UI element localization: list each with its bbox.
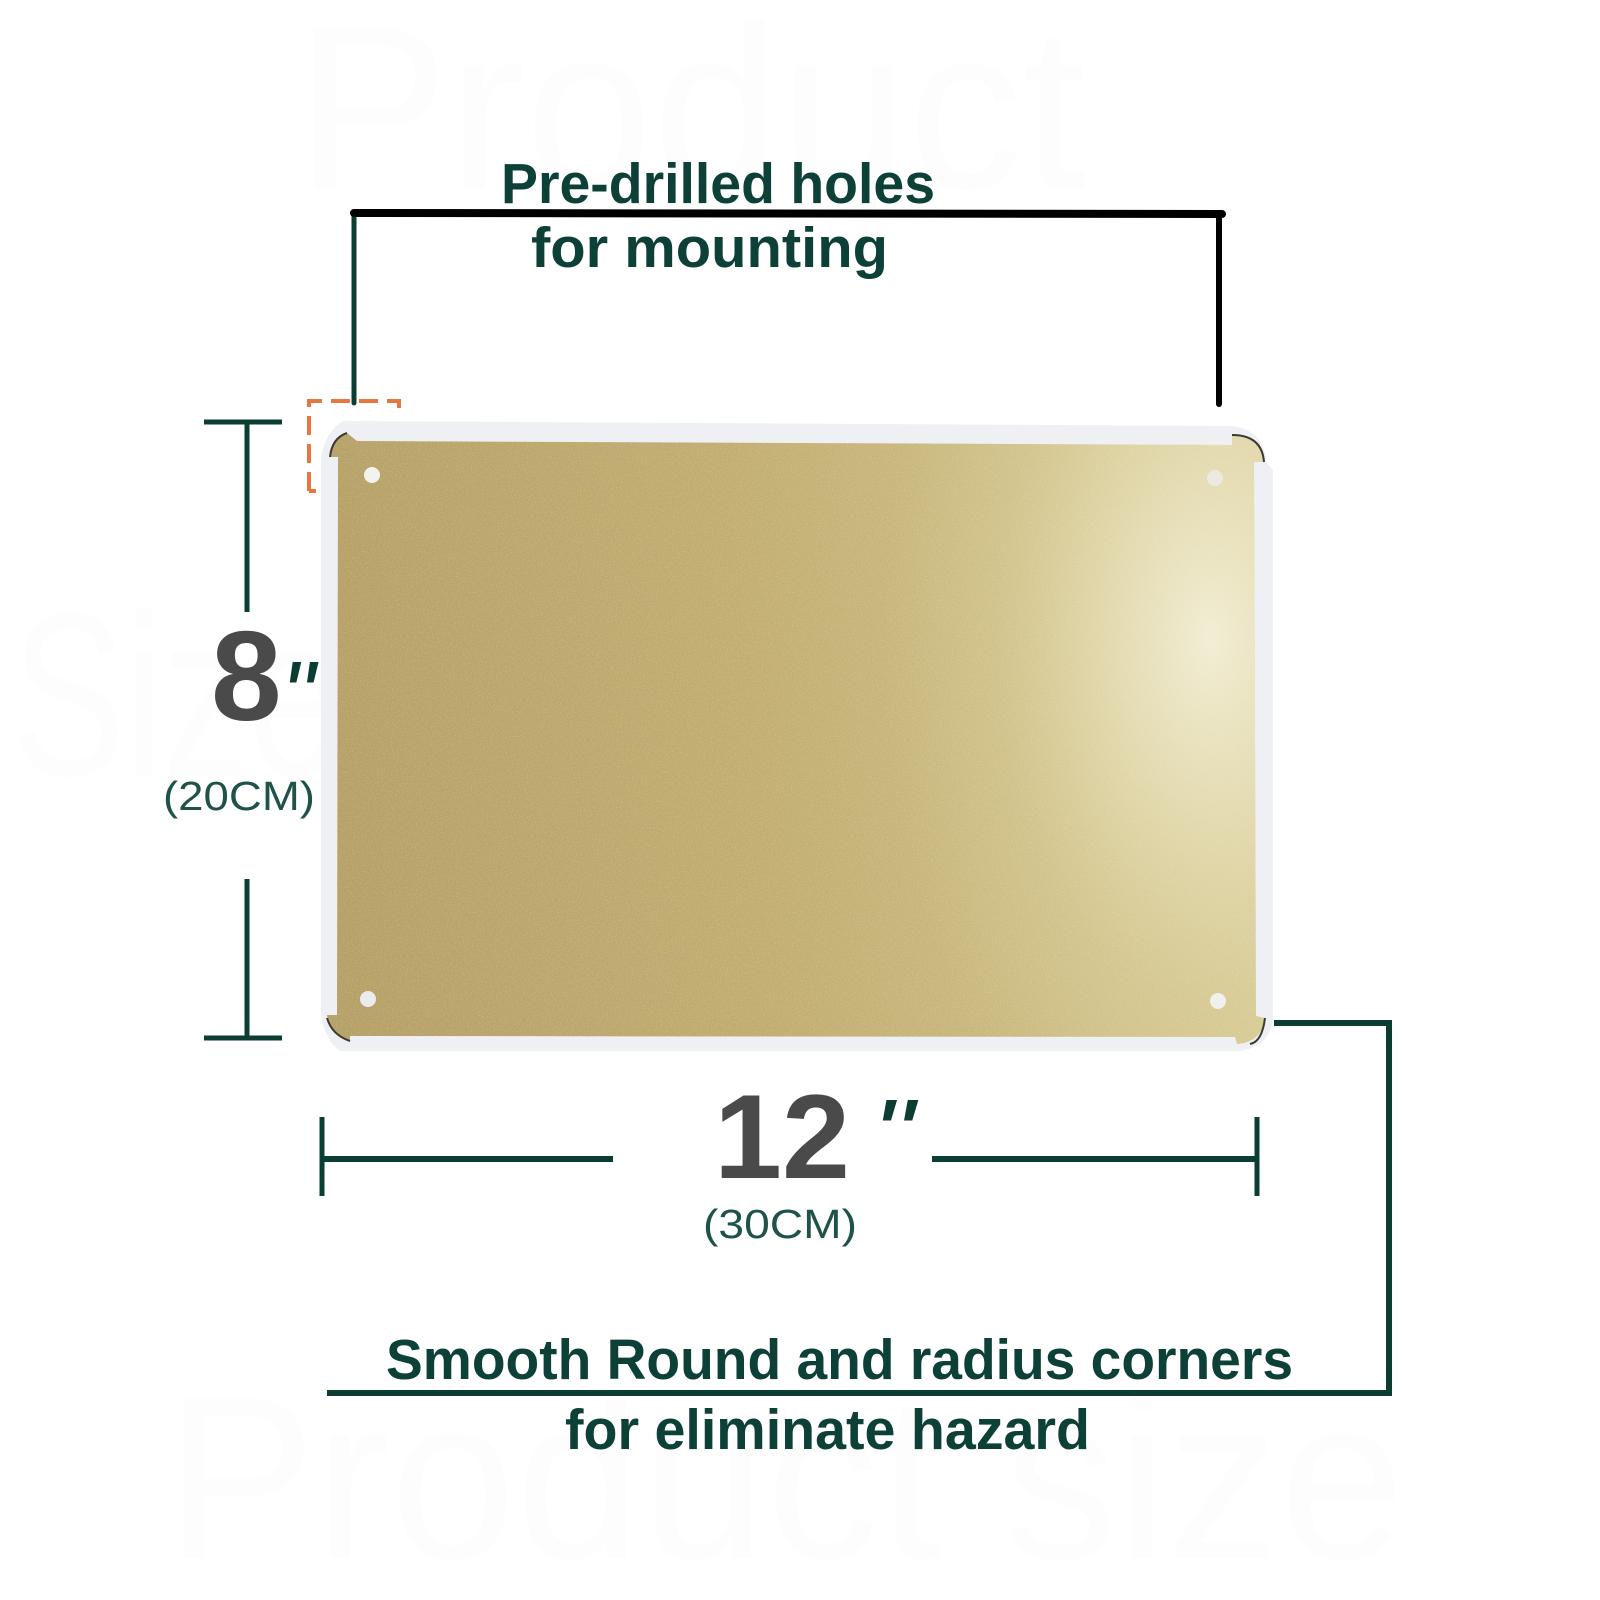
dimension: width line — [322, 1117, 1257, 1196]
label: 12 inch — [714, 1070, 919, 1204]
label: 30 cm: (30CM) — [703, 1201, 857, 1247]
plate: gold panel — [320, 425, 1280, 1055]
plate: white rolled frame — [321, 421, 1273, 1051]
icon: mounting hole top right — [1207, 470, 1223, 486]
label: 8 inch: " — [281, 642, 319, 748]
callout text: smooth round corners — [386, 1328, 1293, 1462]
heading: Pre-drilled holes for mounting: Pre-drilled holes — [501, 152, 935, 216]
heading: Pre-drilled holes for mounting — [501, 152, 935, 280]
label: 20 cm: (20CM) — [163, 773, 315, 819]
infographic: product size diagram — [166, 162, 1392, 1450]
label: 8 inch: 8 — [211, 605, 282, 747]
orange dashed corner highlight — [309, 401, 399, 491]
plate: corner edges — [327, 433, 1265, 1044]
bracket: pre-drilled holes — [354, 213, 1222, 404]
icon: mounting hole top left — [364, 467, 380, 483]
label: 8 inch — [211, 605, 319, 748]
watermark: Size: Size — [12, 566, 342, 825]
icon: mounting hole bottom left — [360, 991, 376, 1007]
callout text: smooth round corners: Smooth Round and radius corners — [386, 1328, 1293, 1392]
dimension: height line — [204, 422, 282, 1038]
icon: mounting hole bottom right — [1210, 993, 1226, 1009]
label: 12 inch: 12 — [714, 1070, 850, 1204]
metal sign plate — [320, 421, 1280, 1055]
leader line: rounded corner callout — [327, 1023, 1389, 1393]
label: 12 inch: " — [872, 1080, 919, 1186]
heading: Pre-drilled holes for mounting: for mounting — [531, 216, 888, 280]
callout text: smooth round corners: for eliminate hazard — [565, 1398, 1090, 1462]
